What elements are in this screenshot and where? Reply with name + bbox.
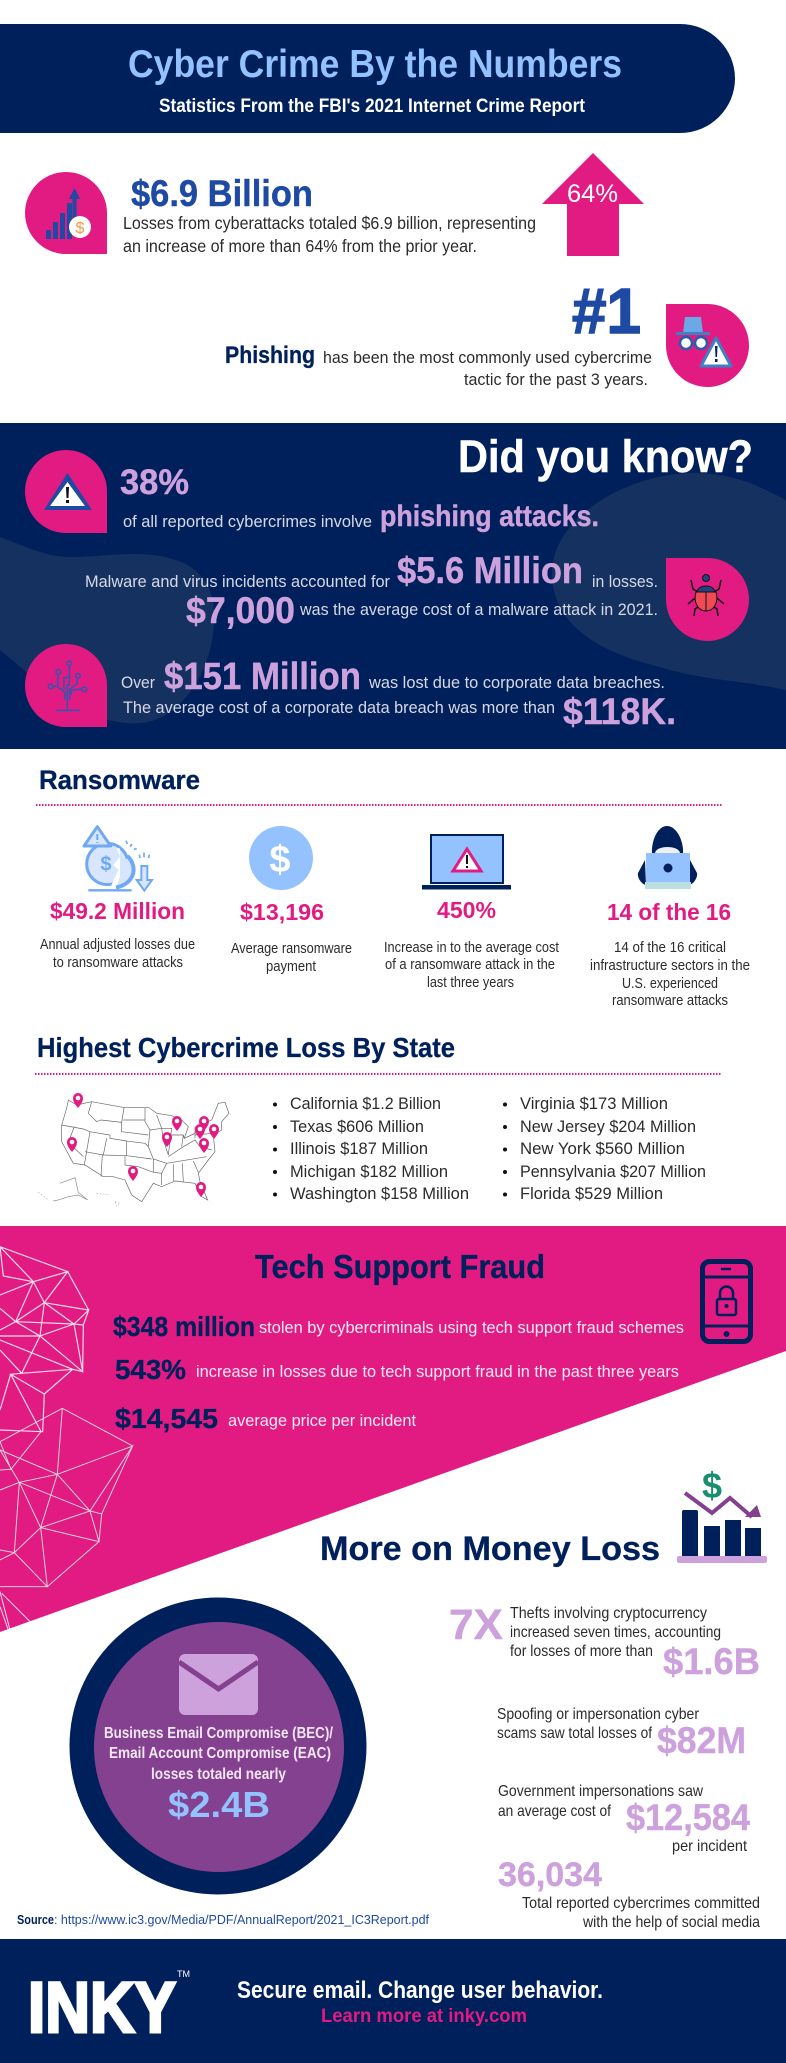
- panel: tech support fraud: [0, 1226, 786, 1632]
- list: states column two: Pennsylvania $207 Million: [520, 1162, 706, 1181]
- text: malware losses: Malware and virus incidents accounted for: [85, 572, 390, 591]
- list: states column one: [273, 1094, 469, 1203]
- stat: crypto thefts: increased seven times, accounting: [510, 1624, 721, 1641]
- list: states column one: Washington $158 Million: [290, 1184, 469, 1203]
- logo: INKY: INKY: [28, 1969, 176, 2048]
- stat: crypto thefts: for losses of more than: [510, 1643, 653, 1660]
- panel: more on money loss: [17, 1465, 767, 1931]
- icon: laptop warning: [422, 835, 511, 890]
- icon: broken money: $: [100, 854, 112, 876]
- stat: social media: [498, 1856, 760, 1931]
- icon: circuit tree: [25, 644, 107, 727]
- icon: bug: [666, 558, 749, 641]
- heading: Highest Cybercrime Loss By State: [37, 1032, 455, 1063]
- icon: hooded hacker: [638, 826, 697, 889]
- item: critical sectors: U.S. experienced: [622, 976, 718, 992]
- chart: email compromise circle: [70, 1598, 366, 1894]
- text: malware losses: was the average cost of a malware attack in 2021.: [299, 600, 658, 619]
- text: malware losses: in losses.: [592, 572, 658, 591]
- stat: social media: with the help of social media: [582, 1914, 760, 1931]
- list: states column two: New York $560 Million: [520, 1139, 685, 1158]
- panel: did you know: [0, 423, 786, 749]
- stat: government impersonation: an average cost of: [498, 1803, 611, 1820]
- chart: email compromise circle: Business Email Compromise (BEC)/: [104, 1725, 334, 1742]
- heading: More on Money Loss: [320, 1530, 660, 1568]
- stat: 348 million: [113, 1311, 684, 1342]
- item: critical sectors: 14 of the 16 critical: [614, 940, 726, 956]
- text: data breaches: $151 Million: [164, 656, 361, 698]
- text: phishing share: phishing attacks.: [380, 500, 599, 533]
- icon: rising chart and coin: [25, 172, 107, 254]
- stat: 348 million: $348 million: [113, 1311, 255, 1342]
- item: average payment: [231, 826, 352, 975]
- heading: Tech Support Fraud: [255, 1248, 545, 1285]
- text: data breaches: The average cost of a corporate data breach was more than: [123, 698, 555, 717]
- footer: [0, 1939, 786, 2063]
- big number: #1: [572, 275, 641, 347]
- stat: 14,545: [115, 1403, 416, 1434]
- stat: spoofing: $82M: [657, 1720, 746, 1761]
- text: data breaches: was lost due to corporate data breaches.: [368, 673, 665, 692]
- list: states column two: Florida $529 Million: [520, 1184, 663, 1203]
- logo: INKY: TM: [177, 1969, 190, 1979]
- panel: ransomware: [36, 765, 750, 1009]
- item: cost increase: [384, 835, 559, 991]
- item: annual losses: $49.2 Million: [50, 898, 185, 924]
- heading: Did you know?: [458, 431, 753, 482]
- description: Losses from cyberattacks totaled $6.9 billion, representing: [123, 213, 536, 233]
- stat: 14,545: $14,545: [115, 1403, 218, 1434]
- stat: 543 percent: increase in losses due to tech support fraud in the past three years: [196, 1362, 679, 1381]
- icon: dollar coin: [249, 826, 313, 890]
- item: annual losses: Annual adjusted losses due: [40, 937, 195, 953]
- text: malware losses: $5.6 Million: [397, 550, 583, 591]
- item: cost increase: last three years: [427, 975, 514, 991]
- stat: phishing number one: [225, 275, 749, 389]
- panel: loss by state: [35, 1032, 722, 1207]
- stat: spoofing: scams saw total losses of: [497, 1725, 652, 1742]
- tagline: Secure email. Change user behavior.: [237, 1977, 603, 2004]
- chart: email compromise circle: losses totaled nearly: [151, 1766, 286, 1783]
- list: states column one: Texas $606 Million: [290, 1117, 424, 1136]
- item: average payment: Average ransomware: [231, 941, 352, 957]
- stat: spoofing: [497, 1706, 746, 1761]
- title: Cyber Crime By the Numbers: [128, 43, 622, 86]
- map: united states with pins: [38, 1093, 229, 1207]
- heading: Ransomware: [39, 765, 200, 795]
- icon: envelope: [179, 1654, 258, 1715]
- text: data breaches: Over: [121, 673, 155, 692]
- stat: government impersonation: Government impersonations saw: [498, 1783, 703, 1800]
- arrow: up 64 percent: 64%: [567, 180, 618, 208]
- icon: falling bars: $: [702, 1465, 722, 1506]
- text: phishing share: [123, 500, 599, 533]
- phishing label: Phishing: [225, 342, 315, 369]
- description: has been the most commonly used cybercrime: [323, 349, 652, 367]
- item: critical sectors: ransomware attacks: [612, 993, 728, 1009]
- stat: government impersonation: [498, 1783, 750, 1855]
- stat: crypto thefts: Thefts involving cryptocurrency: [510, 1605, 707, 1622]
- arrow: up 64 percent: [542, 153, 644, 256]
- stat: spoofing: Spoofing or impersonation cyber: [497, 1706, 700, 1723]
- list: states column two: Virginia $173 Million: [520, 1094, 668, 1113]
- item: annual losses: to ransomware attacks: [53, 955, 183, 971]
- call to action: Learn more at inky.com: [321, 2006, 527, 2027]
- subtitle: Statistics From the FBI's 2021 Internet Crime Report: [159, 96, 586, 117]
- source line: Source: [17, 1913, 54, 1927]
- item: critical sectors: infrastructure sectors in the: [590, 958, 750, 974]
- big number: $6.9 Billion: [131, 173, 313, 214]
- icon: rising chart and coin: $: [76, 220, 85, 237]
- description: [123, 213, 536, 256]
- stat: 543 percent: 543%: [115, 1354, 186, 1385]
- stat: government impersonation: per incident: [672, 1838, 748, 1855]
- description: an increase of more than 64% from the prior year.: [123, 236, 477, 256]
- description: [323, 349, 652, 389]
- icon: spy and warning: [666, 304, 749, 387]
- icon: falling bars: [677, 1465, 767, 1563]
- stat: social media: 36,034: [498, 1856, 602, 1894]
- stat: crypto thefts: 7X: [449, 1601, 503, 1649]
- item: cost increase: 450%: [437, 897, 496, 923]
- chart: email compromise circle: Email Account Compromise (EAC): [109, 1745, 331, 1762]
- text: malware losses: $7,000: [186, 590, 295, 631]
- item: average payment: payment: [266, 959, 316, 975]
- item: critical sectors: [590, 826, 750, 1009]
- description: tactic for the past 3 years.: [464, 371, 648, 389]
- stat: government impersonation: $12,584: [626, 1797, 750, 1838]
- list: states column one: Michigan $182 Million: [290, 1162, 448, 1181]
- stat: social media: Total reported cybercrimes committed: [522, 1895, 760, 1912]
- text: data breaches: $118K.: [563, 691, 676, 732]
- item: cost increase: Increase in to the average cost: [384, 940, 559, 956]
- stat: crypto thefts: $1.6B: [663, 1641, 760, 1682]
- stat: 348 million: stolen by cybercriminals using tech support fraud schemes: [259, 1318, 684, 1337]
- icon: warning triangle: [25, 450, 107, 533]
- stat: 38 percent: 38%: [120, 463, 189, 502]
- stat: crypto thefts: [449, 1601, 760, 1682]
- source line: : https://www.ic3.gov/Media/PDF/AnnualReport/2021_IC3Report.pdf: [54, 1913, 430, 1927]
- stat: 6.9 billion losses: [25, 153, 644, 256]
- text: data breaches: [121, 656, 676, 732]
- header banner: [0, 24, 735, 133]
- text: phishing share: of all reported cybercrimes involve: [123, 512, 372, 531]
- icon: dollar coin: $: [269, 839, 291, 881]
- chart: email compromise circle: $2.4B: [168, 1784, 270, 1825]
- item: cost increase: of a ransomware attack in the: [385, 957, 555, 973]
- text: malware losses: [85, 550, 658, 631]
- icon: phone with lock: [702, 1262, 751, 1342]
- list: states column one: Illinois $187 Million: [290, 1139, 428, 1158]
- stat: 14,545: average price per incident: [228, 1411, 416, 1430]
- list: states column two: [503, 1094, 706, 1203]
- stat: 543 percent: [115, 1354, 679, 1385]
- list: states column two: New Jersey $204 Million: [520, 1117, 696, 1136]
- item: average payment: $13,196: [240, 899, 324, 925]
- icon: broken money: [84, 827, 152, 891]
- item: critical sectors: 14 of the 16: [607, 899, 731, 925]
- item: annual losses: [40, 827, 195, 971]
- list: states column one: California $1.2 Billion: [290, 1094, 441, 1113]
